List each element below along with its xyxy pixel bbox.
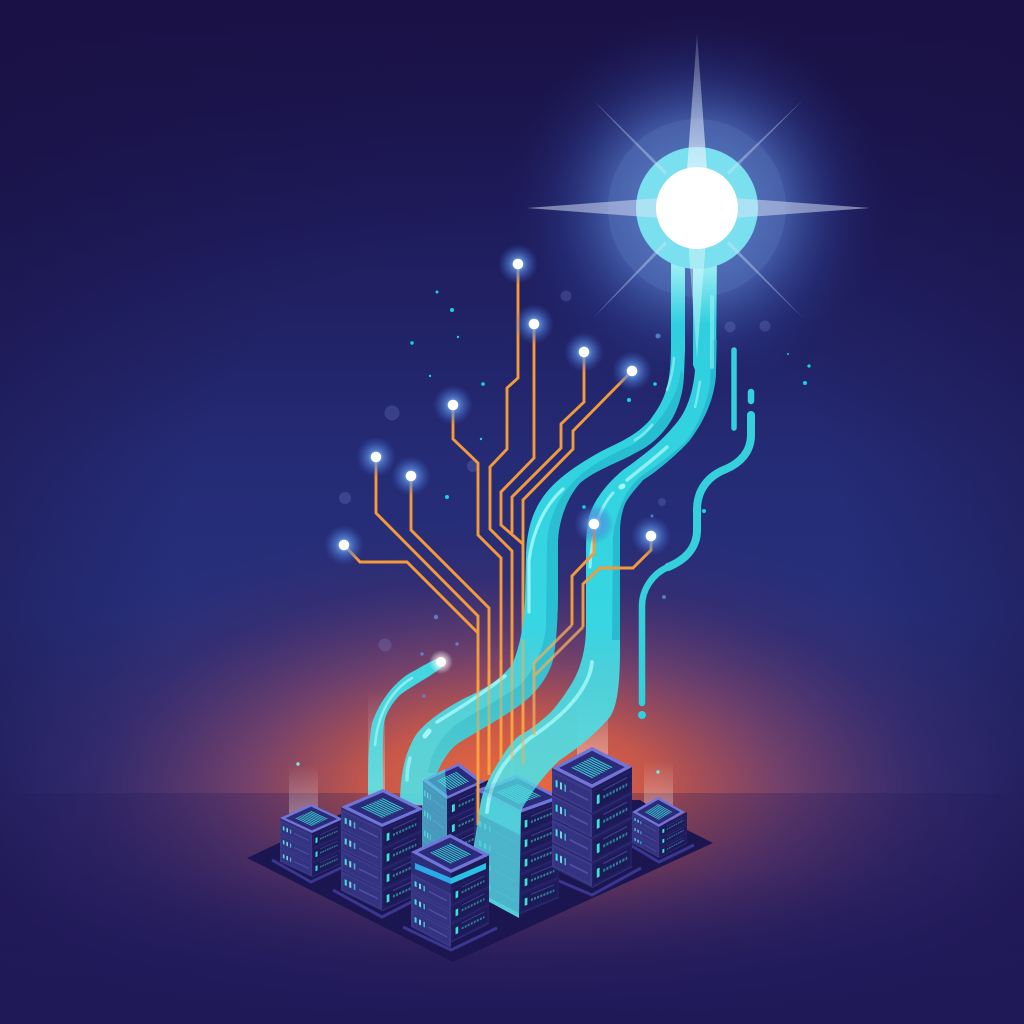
server: centre, wrapped by stream <box>473 775 562 918</box>
floating particles <box>296 290 811 774</box>
data stream: centre <box>473 250 717 918</box>
data stream: left <box>400 250 685 805</box>
server: back centre <box>422 763 488 880</box>
server: small right <box>632 797 687 858</box>
server: tall right <box>552 747 632 888</box>
circuit traces seen through the streams <box>478 524 651 825</box>
light columns rising from servers <box>289 690 673 820</box>
server: medium left <box>341 789 424 911</box>
data stream: small left with node <box>368 650 453 795</box>
data stream: thin right <box>642 350 751 703</box>
stream end dot <box>638 711 646 719</box>
glowing star <box>527 34 870 358</box>
platform <box>247 800 713 962</box>
server: small left <box>280 804 343 877</box>
star glow and halo <box>502 13 892 403</box>
circuit traces <box>344 264 632 825</box>
server details showing through the stream <box>475 775 562 913</box>
server: front with cyan band <box>411 834 490 948</box>
server base outlines <box>272 843 694 950</box>
circuit nodes <box>324 244 671 565</box>
